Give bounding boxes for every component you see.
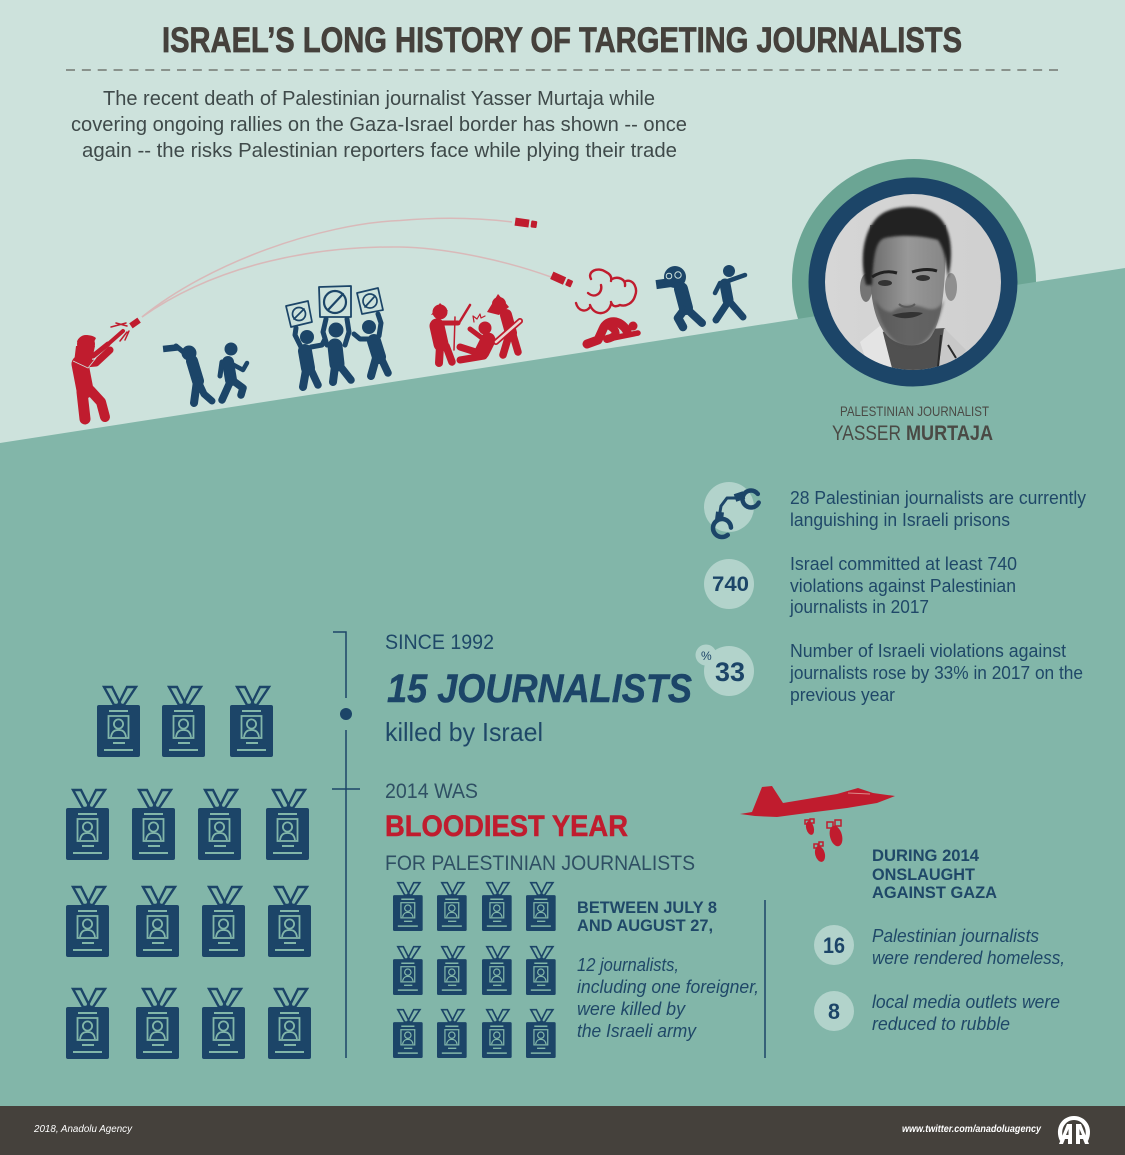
stat: prisoners: languishing in Israeli prisons	[790, 510, 1010, 530]
icon: soldier firing	[73, 318, 141, 419]
heading: 15 journalists killed: killed by Israel	[385, 717, 543, 747]
icon: walking journalist	[220, 342, 247, 400]
heading: 15 journalists killed: SINCE 1992	[385, 631, 494, 654]
text: between July 8 and August 27: including one foreigner,	[577, 977, 759, 997]
icon: tear gas canister upper	[515, 218, 537, 229]
text: between July 8 and August 27: were killed by	[577, 999, 686, 1019]
text: during 2014 onslaught	[872, 846, 997, 902]
intro text: covering ongoing rallies on the Gaza-Israel border has shown -- once	[71, 114, 687, 136]
journalist caption	[832, 403, 993, 445]
footer bar	[0, 1106, 1125, 1155]
stat: 8 media outlets: 8	[828, 999, 840, 1024]
stat: 33 percent rise: previous year	[790, 685, 895, 705]
icon: protesters with signs	[286, 286, 388, 387]
stat: 740 violations	[704, 554, 1017, 617]
icon: soldiers beating a journalist	[431, 294, 520, 363]
heading: bloodiest year: BLOODIEST YEAR	[385, 810, 628, 843]
intro text	[71, 88, 687, 162]
portrait of Yasser Murtaja	[817, 186, 1010, 378]
text: between July 8 and August 27: BETWEEN JULY 8	[577, 898, 717, 917]
stat: 16 homeless	[814, 925, 1065, 968]
stat: 33 percent rise: 33	[715, 657, 745, 687]
text: during 2014 onslaught: AGAINST GAZA	[872, 883, 997, 902]
text: during 2014 onslaught: DURING 2014	[872, 846, 980, 865]
heading: bloodiest year	[385, 780, 695, 875]
icon: fighter jet dropping bombs	[740, 786, 895, 863]
background: teal slope	[0, 268, 1125, 1155]
journalist caption: PALESTINIAN JOURNALIST	[840, 403, 989, 419]
portrait outer ring	[792, 159, 1036, 403]
title: ISRAEL’S LONG HISTORY OF TARGETING JOURNALISTS	[162, 21, 962, 60]
text: during 2014 onslaught: ONSLAUGHT	[872, 865, 976, 884]
stat: prisoners	[704, 482, 1086, 541]
stat: 8 media outlets: local media outlets were	[872, 992, 1060, 1012]
text: between July 8 and August 27	[577, 898, 759, 1041]
stat: prisoners: 28 Palestinian journalists are currently	[790, 488, 1086, 508]
stat: 740 violations: Israel committed at least 740	[790, 554, 1017, 574]
text: between July 8 and August 27: AND AUGUST 27,	[577, 916, 713, 935]
heading: 15 journalists killed	[385, 631, 692, 747]
timeline rule	[332, 632, 360, 1058]
icon: tear gas cloud	[576, 270, 636, 313]
stat: 33 percent rise: Number of Israeli violations against	[790, 641, 1066, 661]
stat: 8 media outlets: reduced to rubble	[872, 1014, 1010, 1034]
heading: 15 journalists killed: 15 JOURNALISTS	[387, 667, 692, 711]
icon: photojournalist	[163, 344, 212, 403]
stat: 33 percent rise: journalists rose by 33% in 2017 on the	[789, 663, 1083, 683]
projectile trajectories	[142, 218, 551, 317]
icon: cameraman in gas mask	[656, 266, 702, 327]
icon: tear gas canister lower	[550, 272, 574, 288]
journalist caption: MURTAJA	[906, 422, 993, 445]
icon: walking reporter	[715, 265, 745, 320]
footer bar: 2018, Anadolu Agency	[33, 1124, 133, 1135]
intro text: again -- the risks Palestinian reporters face while plying their trade	[82, 140, 677, 162]
text: between July 8 and August 27: 12 journalists,	[577, 955, 679, 975]
stat: 740 violations: journalists in 2017	[789, 597, 929, 617]
heading: bloodiest year: 2014 WAS	[385, 780, 478, 803]
stat: 16 homeless: were rendered homeless,	[872, 948, 1065, 968]
stat: 740 violations: violations against Palestinian	[790, 576, 1016, 596]
stat: 33 percent rise: %	[701, 649, 712, 663]
icon: Anadolu Agency logo	[1058, 1116, 1090, 1144]
journalist caption: YASSER	[832, 422, 901, 445]
stat: 740 violations: 740	[712, 573, 749, 596]
footer bar: www.twitter.com/anadoluagency	[902, 1124, 1041, 1135]
stat: 8 media outlets	[814, 991, 1060, 1034]
icons: 12 small press badges	[393, 883, 556, 1058]
stat: 16 homeless: 16	[823, 933, 845, 958]
intro text: The recent death of Palestinian journalist Yasser Murtaja while	[103, 88, 655, 110]
stat: 16 homeless: Palestinian journalists	[872, 926, 1039, 946]
icon: crouching victim	[587, 322, 638, 344]
text: between July 8 and August 27: the Israeli army	[577, 1021, 697, 1041]
icons: 15 press badges	[66, 687, 311, 1059]
heading: bloodiest year: FOR PALESTINIAN JOURNALISTS	[385, 852, 695, 875]
stat: 33 percent rise	[696, 641, 1083, 705]
